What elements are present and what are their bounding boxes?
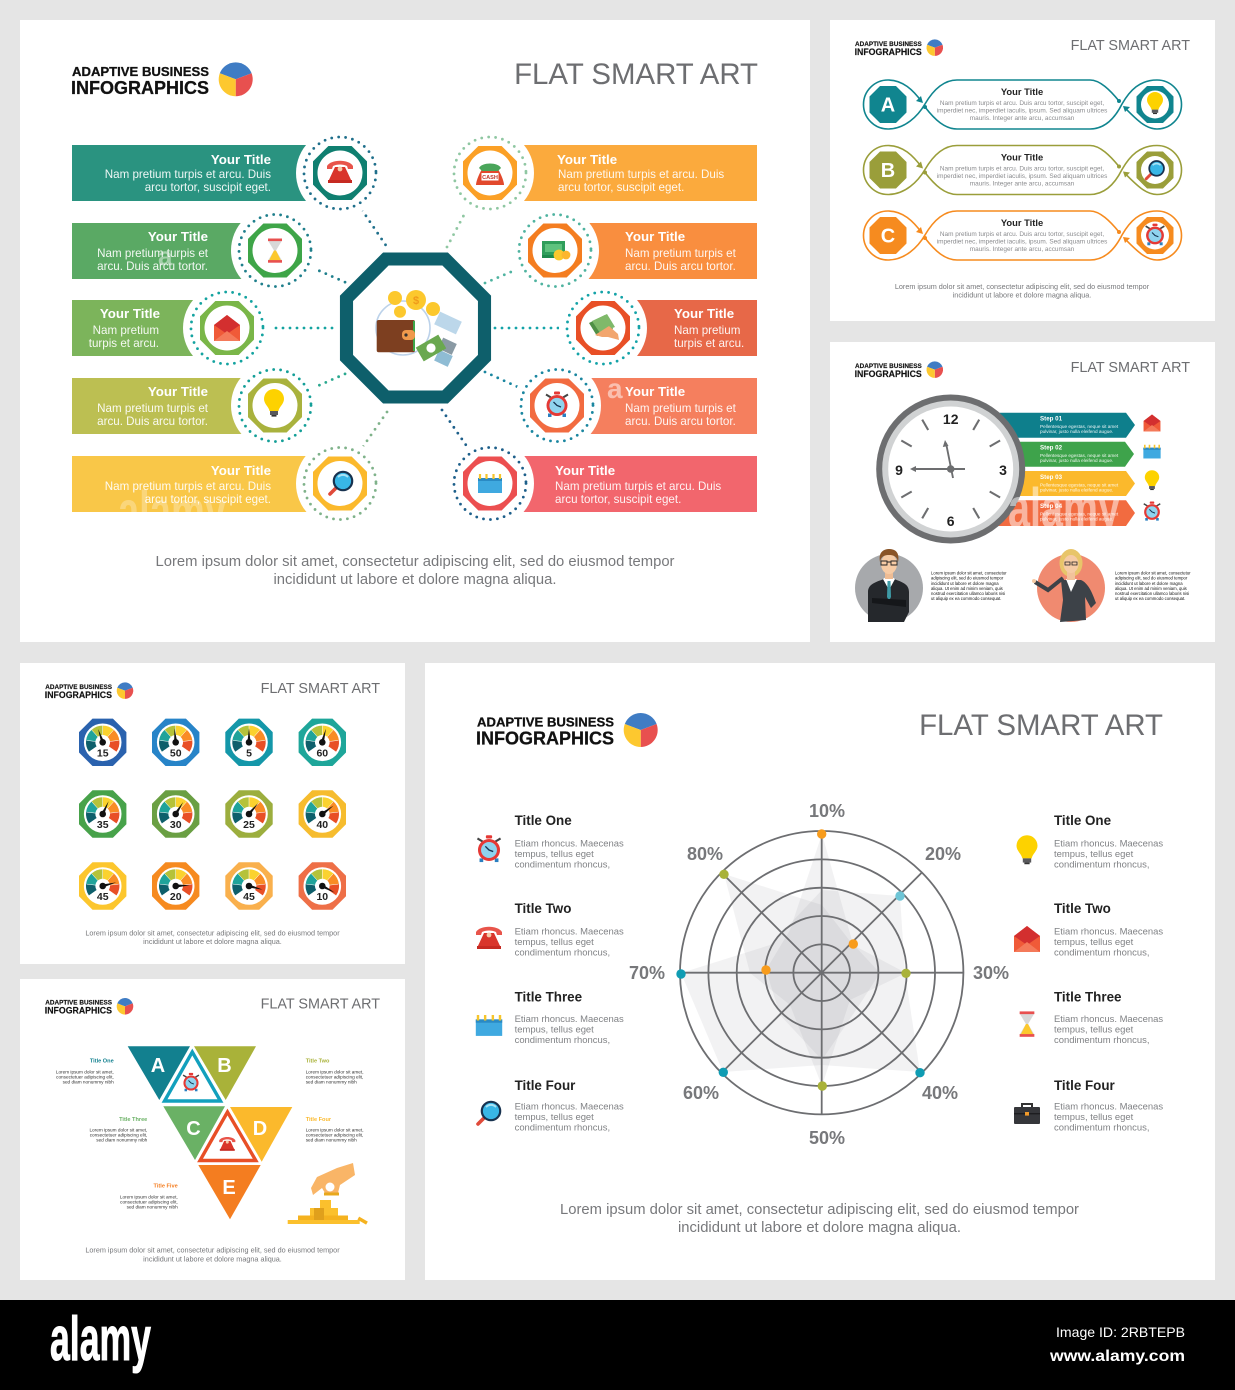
gauge 40 [299, 790, 346, 838]
label: title one: Title One [90, 1059, 114, 1065]
gauge 25 [225, 790, 273, 838]
dotted connectors [262, 210, 563, 448]
businesswoman text: incididunt ut labore et dolore magna [1115, 581, 1183, 586]
logo: ADAPTIVE BUSINESS [72, 64, 209, 79]
gauge 60 [299, 719, 346, 766]
list item right 4: Etiam rhoncus. Maecenas [1054, 1102, 1163, 1112]
list item right 1: Title One [1054, 813, 1111, 828]
row: right 5: Your Title [555, 463, 615, 478]
row: right 5: Nam pretium turpis et arcu. Duis [555, 480, 721, 493]
footer text: Lorem ipsum dolor sit amet, consectetur adipiscing elit, sed do eiusmod tempor [895, 282, 1150, 291]
logo: INFOGRAPHICS [45, 690, 112, 700]
list item left 4 [478, 1078, 624, 1134]
row: left 4: Your Title [148, 384, 208, 399]
label: title three [89, 1117, 148, 1143]
central octagon with wallet: $ [413, 295, 419, 307]
loop B [863, 146, 1182, 194]
businesswoman text: aliqua. Ut enim ad minim veniam, quis [1115, 586, 1187, 591]
logo [71, 62, 253, 98]
row: left 3 [72, 284, 271, 372]
list item left 1: tempus, tellus eget [515, 849, 594, 860]
loop A: A [881, 94, 895, 116]
heading: FLAT SMART ART [1071, 38, 1190, 54]
footer text: Lorem ipsum dolor sit amet, consectetur adipiscing elit, sed do eiusmod tempor [560, 1202, 1079, 1218]
footer text: Lorem ipsum dolor sit amet, consectetur adipiscing elit, sed do eiusmod tempor [156, 554, 675, 570]
step arrows: Pellentesque egestas, neque sit amet [1040, 453, 1119, 458]
list item left 4: tempus, tellus eget [515, 1112, 594, 1123]
label: title four: Title Four [306, 1117, 332, 1123]
logo: INFOGRAPHICS [855, 47, 922, 57]
row: right 4: Your Title [625, 384, 685, 399]
row: right 2 [511, 206, 757, 294]
label: title two: Lorem ipsum dolor sit amet, [306, 1069, 364, 1074]
list item right 2: condimentum rhoncus, [1054, 948, 1149, 958]
wall clock [876, 394, 1025, 544]
logo: INFOGRAPHICS [476, 728, 614, 749]
list item left 2: condimentum rhoncus, [515, 948, 610, 958]
panel: clock and steps [830, 342, 1215, 642]
list item right 4 [1014, 1078, 1163, 1134]
row: right 3: Your Title [674, 306, 734, 321]
gauge 20 [152, 862, 199, 910]
logo [45, 682, 133, 700]
label: title five: consectetuer adipiscing elit, [120, 1200, 178, 1205]
list item left 1: condimentum rhoncus, [515, 860, 610, 870]
label: title two: consectetuer adipiscing elit, [306, 1074, 363, 1079]
image id: Image ID: 2RBTEPB [1056, 1324, 1185, 1340]
radar chart: 50% [809, 1128, 845, 1148]
step arrows: Step 02 [1040, 444, 1063, 452]
list item left 3 [476, 990, 624, 1046]
alamy brand: alamy [50, 1305, 151, 1374]
step arrows: Step 04 [1040, 503, 1063, 510]
row: left 1: Your Title [211, 152, 271, 167]
gauge 10: 10 [316, 891, 328, 903]
gauge 5 [225, 719, 273, 766]
logo [45, 998, 133, 1015]
radar chart: 10% [809, 801, 845, 821]
triangle diagram: B [217, 1055, 232, 1077]
row: right 5: arcu tortor, suscipit eget. [555, 493, 681, 506]
label: title one: sed diam nonummy nibh [63, 1079, 114, 1084]
footer text: incididunt ut labore et dolore magna aliqua. [143, 1254, 282, 1263]
loop A: mauris. Integer ante arcu, accumsan [970, 115, 1075, 122]
loop C: Nam pretium turpis et arcu. Duis arcu tortor, suscipit eget, [940, 231, 1104, 238]
row: right 2: arcu. Duis arcu tortor. [625, 260, 736, 273]
loop C: mauris. Integer ante arcu, accumsan [970, 246, 1075, 253]
list item left 4: Etiam rhoncus. Maecenas [515, 1102, 624, 1112]
row: left 2: arcu. Duis arcu tortor. [97, 260, 208, 273]
footer bar [0, 1300, 1235, 1390]
radar chart: 30% [973, 963, 1009, 983]
list item right 4: condimentum rhoncus, [1054, 1122, 1149, 1134]
logo [476, 713, 658, 749]
radar chart: 60% [683, 1083, 719, 1103]
step arrows [990, 413, 1135, 526]
panel: infinity loops [830, 20, 1215, 321]
watermark overlays: alamy [118, 479, 226, 542]
watermark overlays [118, 241, 1120, 542]
gauge 45 yellow [79, 862, 126, 910]
radar chart: 70% [629, 963, 665, 983]
step arrows: Step 01 [1040, 416, 1063, 422]
row: right 1 [446, 129, 757, 217]
row: left 1 [72, 129, 384, 217]
step arrows: Pellentesque egestas, neque sit amet [1040, 482, 1119, 487]
gauge 10 [299, 862, 346, 910]
step arrows: pulvinar, justo nulla eleifend augue. [1040, 458, 1113, 463]
label: title two: sed diam nonummy nibh [306, 1079, 357, 1084]
list item right 3: Title Three [1054, 990, 1121, 1004]
logo: ADAPTIVE BUSINESS [855, 363, 922, 370]
businessman text: ut aliquip ex ea commodo consequat. [931, 596, 1001, 601]
row: left 2 [72, 206, 319, 294]
step arrows: pulvinar, justo nulla eleifend augue. [1040, 516, 1113, 522]
footer text [85, 1246, 340, 1263]
heading: FLAT SMART ART [919, 709, 1163, 742]
list item right 3: tempus, tellus eget [1054, 1024, 1134, 1036]
gauge 30 [152, 790, 199, 838]
wall clock: 12 [943, 411, 959, 427]
row: left 3: Nam pretium [93, 324, 159, 337]
footer text: Lorem ipsum dolor sit amet, consectetur adipiscing elit, sed do eiusmod tempor [85, 928, 340, 938]
gauge 40: 40 [316, 819, 328, 831]
central octagon with wallet [346, 259, 484, 397]
row: right 4 [513, 362, 757, 450]
label: title three: sed diam nonummy nibh [96, 1138, 148, 1143]
businesswoman [1032, 549, 1105, 622]
radar chart: 40% [922, 1083, 958, 1103]
gauge 60: 60 [316, 747, 328, 759]
list item left 3: condimentum rhoncus, [515, 1035, 610, 1046]
list item right 4: tempus, tellus eget [1054, 1112, 1134, 1123]
loop B: Your Title [1001, 152, 1043, 162]
loop B: mauris. Integer ante arcu, accumsan [970, 180, 1075, 188]
heading: FLAT SMART ART [1071, 360, 1190, 376]
gauge 45 yellow: 45 [97, 891, 109, 903]
gauge 35 [79, 790, 126, 838]
wall clock: 9 [895, 462, 903, 478]
gauge 50 [152, 719, 199, 766]
label: title three: Title Three [119, 1117, 147, 1123]
triangle diagram: E [222, 1177, 236, 1199]
step arrows: Pellentesque egestas, neque sit amet [1040, 512, 1119, 516]
row: left 5 [72, 440, 384, 528]
row: right 4: Nam pretium turpis et [625, 402, 737, 415]
gauge 45 light orange [225, 862, 273, 910]
step arrows: Step 03 [1040, 474, 1063, 481]
businessman text [931, 570, 1007, 601]
businessman text: Lorem ipsum dolor sit amet, consectetur [931, 570, 1007, 576]
triangle diagram [128, 1046, 292, 1219]
logo: ADAPTIVE BUSINESS [477, 715, 614, 730]
list item right 2: tempus, tellus eget [1054, 937, 1134, 948]
row: left 3: turpis et arcu. [89, 337, 159, 350]
list item left 4: Title Four [515, 1078, 576, 1093]
radar chart: 20% [925, 844, 961, 864]
list item left 4: condimentum rhoncus, [515, 1122, 610, 1134]
step arrows: pulvinar, justo nulla eleifend augue. [1040, 487, 1113, 492]
row: right 4: arcu. Duis arcu tortor. [625, 415, 736, 428]
businesswoman text [1115, 570, 1191, 601]
row: left 3: Your Title [100, 306, 160, 321]
row: left 5: Nam pretium turpis et arcu. Duis [105, 480, 271, 493]
step arrows: Pellentesque egestas, neque sit amet [1040, 424, 1119, 429]
gauge 50: 50 [170, 747, 182, 759]
step arrows: pulvinar, justo nulla eleifend augue. [1040, 429, 1113, 434]
row: left 4: arcu. Duis arcu tortor. [97, 415, 208, 428]
logo: INFOGRAPHICS [71, 77, 209, 98]
row: right 1: Nam pretium turpis et arcu. Duis [558, 168, 724, 181]
businesswoman text: adipiscing elit, sed do eiusmod tempor [1115, 576, 1188, 581]
logo: ADAPTIVE BUSINESS [45, 1000, 112, 1007]
logo: INFOGRAPHICS [45, 1005, 112, 1015]
row: right 5 [446, 440, 757, 528]
gauge 30: 30 [170, 819, 182, 831]
loop A: Your Title [1001, 86, 1043, 97]
label: title five: sed diam nonummy nibh [127, 1205, 178, 1210]
list item right 4: Title Four [1054, 1078, 1116, 1093]
footer text [156, 554, 675, 588]
label: title five: Lorem ipsum dolor sit amet, [120, 1195, 178, 1200]
footer text: incididunt ut labore et dolore magna aliqua. [678, 1220, 961, 1236]
label: title one: consectetuer adipiscing elit, [56, 1074, 114, 1079]
label: title four [306, 1117, 364, 1143]
row: left 2: Your Title [148, 229, 208, 244]
list item left 1 [477, 813, 624, 870]
footer text: Lorem ipsum dolor sit amet, consectetur adipiscing elit, sed do eiusmod tempor [85, 1246, 340, 1255]
logo: ADAPTIVE BUSINESS [855, 41, 922, 48]
gauge 25: 25 [243, 819, 255, 831]
wall clock: 3 [999, 462, 1007, 478]
label: title four: Lorem ipsum dolor sit amet, [306, 1128, 364, 1133]
panel: hub and spoke diagram [20, 20, 810, 642]
gauge 15: 15 [97, 747, 109, 759]
list item left 2: Etiam rhoncus. Maecenas [515, 926, 624, 938]
list item right 2 [1014, 901, 1163, 958]
row: right 3: Nam pretium [674, 324, 740, 337]
triangle diagram: A [151, 1055, 165, 1077]
businessman [855, 549, 923, 622]
panel: radar chart [425, 663, 1215, 1280]
panel: gauges [20, 663, 405, 964]
watermark overlays: alamy [1008, 476, 1120, 539]
businessman text: nostrud exercitation ullamco laboris nisi [931, 591, 1005, 596]
row: right 3 [559, 284, 757, 372]
businesswoman text: ut aliquip ex ea commodo consequat. [1115, 596, 1185, 601]
businessman text: adipiscing elit, sed do eiusmod tempor [931, 576, 1004, 581]
list item left 1: Etiam rhoncus. Maecenas [515, 838, 624, 850]
list item left 3: Title Three [515, 990, 582, 1004]
triangle diagram: C [186, 1118, 201, 1140]
website: www.alamy.com [1049, 1348, 1185, 1365]
panel: triangles [20, 979, 405, 1280]
list item left 2: tempus, tellus eget [515, 937, 594, 948]
label: title four: consectetuer adipiscing elit, [306, 1133, 363, 1138]
row: left 4: Nam pretium turpis et [97, 402, 209, 415]
row: left 2: Nam pretium turpis et [97, 247, 209, 260]
logo [855, 39, 943, 57]
logo: INFOGRAPHICS [855, 369, 922, 379]
list item right 1: tempus, tellus eget [1054, 849, 1134, 860]
list item left 2 [476, 901, 624, 958]
row: right 1: Your Title [557, 152, 617, 167]
list item right 3: Etiam rhoncus. Maecenas [1054, 1014, 1163, 1025]
icons beside steps [1143, 415, 1161, 521]
list item left 1: Title One [515, 813, 572, 828]
businessman text: aliqua. Ut enim ad minim veniam, quis [931, 586, 1003, 591]
label: title four: sed diam nonummy nibh [306, 1138, 357, 1143]
footer text: incididunt ut labore et dolore magna aliqua. [143, 937, 282, 946]
heading: FLAT SMART ART [261, 997, 380, 1013]
list item left 2: Title Two [515, 901, 571, 916]
label: title one: Lorem ipsum dolor sit amet, [56, 1069, 114, 1074]
label: title one [56, 1059, 114, 1084]
list item right 1: condimentum rhoncus, [1054, 860, 1149, 870]
list item right 2: Title Two [1054, 901, 1111, 916]
row: left 5: arcu tortor, suscipit eget. [145, 493, 271, 506]
gauge 15 [79, 719, 126, 766]
businesswoman text: nostrud exercitation ullamco laboris nisi [1115, 591, 1189, 596]
logo [855, 361, 943, 379]
icon: hand placing coins [288, 1163, 368, 1225]
label: title three: Lorem ipsum dolor sit amet, [89, 1128, 147, 1133]
wall clock: 6 [947, 513, 955, 529]
footer text: incididunt ut labore et dolore magna aliqua. [274, 572, 556, 588]
gauge 5: 5 [246, 747, 252, 759]
row: left 1: arcu tortor, suscipit eget. [145, 181, 271, 194]
loop A: imperdiet nec, imperdiet iaculis, ipsum. Sed aliquam ultrices [937, 108, 1107, 114]
row: right 2: Nam pretium turpis et [625, 247, 737, 260]
loop A: Nam pretium turpis et arcu. Duis arcu tortor, suscipit eget, [940, 100, 1104, 107]
row: right 2: Your Title [625, 229, 685, 244]
gauge 45 light orange: 45 [243, 891, 255, 903]
loop C: Your Title [1001, 217, 1043, 228]
radar chart: 80% [687, 844, 723, 864]
row: right 1: arcu tortor, suscipit eget. [558, 181, 684, 194]
footer text: incididunt ut labore et dolore magna aliqua. [953, 290, 1091, 300]
list item right 2: Etiam rhoncus. Maecenas [1054, 926, 1163, 938]
list item right 1: Etiam rhoncus. Maecenas [1054, 838, 1163, 850]
gauge 35: 35 [97, 819, 109, 831]
footer text [85, 928, 340, 946]
businesswoman text: Lorem ipsum dolor sit amet, consectetur [1115, 570, 1191, 576]
label: title five [120, 1184, 178, 1210]
row: left 5: Your Title [211, 463, 271, 478]
footer text [895, 282, 1150, 300]
loop B: B [881, 160, 895, 182]
label: title five: Title Five [154, 1184, 178, 1190]
label: title two: Title Two [306, 1059, 330, 1065]
list item left 3: Etiam rhoncus. Maecenas [515, 1014, 624, 1025]
footer text [560, 1202, 1079, 1236]
loop A [863, 80, 1182, 129]
label: title two [306, 1059, 364, 1084]
heading: FLAT SMART ART [261, 681, 380, 697]
list item right 3 [1020, 990, 1163, 1046]
list item right 1 [1016, 813, 1163, 870]
loop B: imperdiet nec, imperdiet iaculis, ipsum. Sed aliquam ultrices [937, 173, 1107, 180]
row: right 3: turpis et arcu. [674, 337, 744, 350]
loop C: imperdiet nec, imperdiet iaculis, ipsum. Sed aliquam ultrices [937, 238, 1107, 246]
list item left 3: tempus, tellus eget [515, 1024, 594, 1036]
watermark overlays: a [158, 241, 173, 271]
list item right 3: condimentum rhoncus, [1054, 1035, 1149, 1046]
gauge 20: 20 [170, 891, 182, 903]
row: left 1: Nam pretium turpis et arcu. Duis [105, 168, 271, 181]
businessman text: incididunt ut labore et dolore magna [931, 581, 999, 586]
triangle diagram: D [253, 1118, 267, 1140]
loop B: Nam pretium turpis et arcu. Duis arcu tortor, suscipit eget, [940, 166, 1104, 172]
row: left 4 [72, 362, 319, 450]
logo: ADAPTIVE BUSINESS [45, 684, 112, 691]
heading: FLAT SMART ART [514, 58, 758, 91]
label: title three: consectetuer adipiscing elit, [90, 1133, 147, 1138]
watermark overlays: a [607, 373, 623, 404]
loop C [863, 211, 1182, 260]
loop C: C [881, 226, 895, 248]
radar chart [629, 801, 1009, 1148]
